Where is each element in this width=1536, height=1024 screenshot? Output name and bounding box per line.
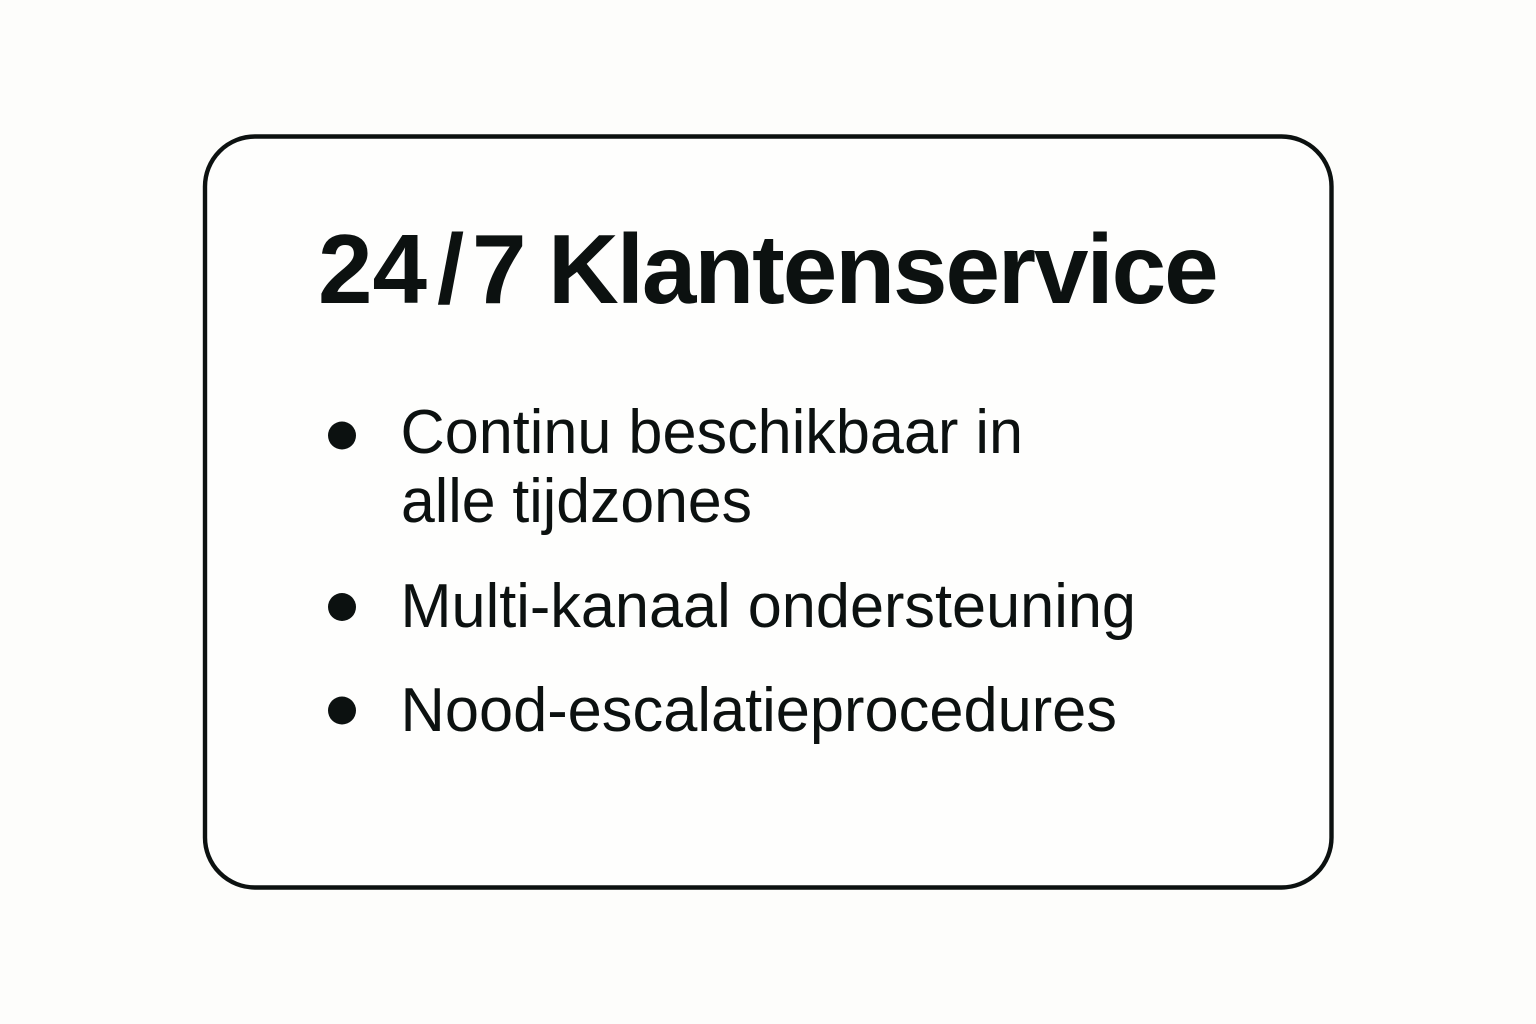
bullet item 1: alle tijdzones [401,467,752,536]
bullet item 3: Nood-escalatieprocedures [400,676,1117,745]
bullet item 2: Multi-kanaal ondersteuning [400,572,1136,641]
title: Klantenservice [548,214,1217,324]
bullet item 1: Continu beschikbaar in [400,398,1023,467]
bullet item 1 [328,398,1023,536]
panel: card [205,136,1332,888]
title: 7 [472,214,554,324]
title: / [437,214,464,324]
title: 24 [318,214,427,324]
